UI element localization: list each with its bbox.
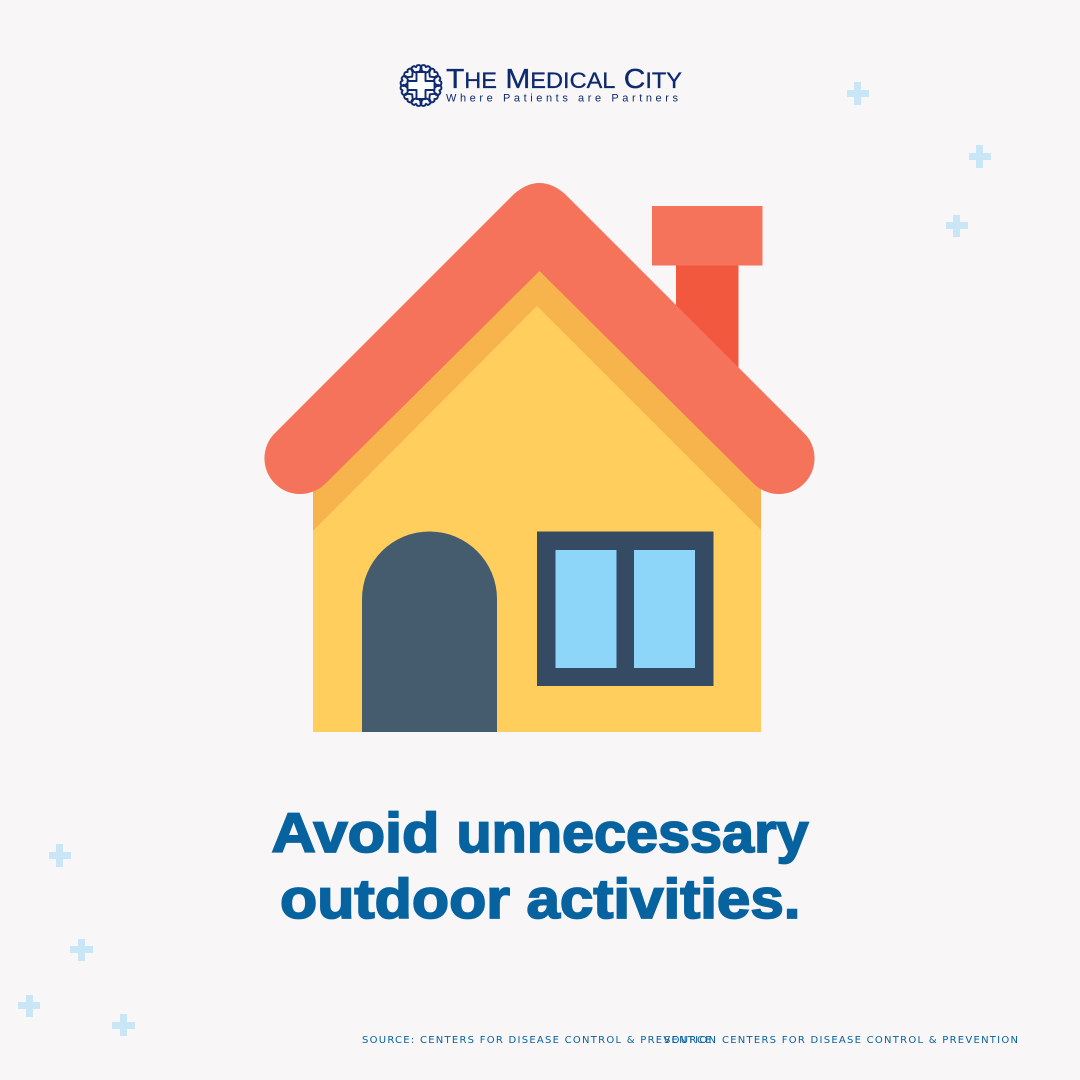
roof shadow (313, 250, 761, 531)
decorative plus signs (18, 82, 991, 1036)
logo emblem (400, 64, 442, 107)
source credits: SOURCE: CENTERS FOR DISEASE CONTROL & PREVENTION (362, 1035, 716, 1046)
source credits: SOURCE: CENTERS FOR DISEASE CONTROL & PREVENTION (664, 1035, 1018, 1046)
window frame (537, 532, 714, 686)
window pane right (634, 550, 695, 668)
chimney stack (676, 260, 738, 375)
headline: Avoid (272, 801, 440, 864)
headline (272, 801, 808, 930)
chimney cap (652, 206, 762, 266)
logo: The Medical City (400, 63, 682, 107)
roof (264, 183, 815, 494)
window pane left (556, 550, 616, 668)
source credits (362, 1035, 1018, 1046)
headline: unnecessary (456, 801, 808, 864)
door (362, 532, 497, 732)
headline: activities. (526, 867, 800, 930)
logo wordmark: THE MEDICAL CITY (446, 63, 682, 94)
headline: outdoor (280, 867, 510, 930)
icon: house (264, 183, 815, 732)
logo tagline: Where Patients are Partners (446, 92, 678, 104)
house wall (313, 250, 761, 732)
